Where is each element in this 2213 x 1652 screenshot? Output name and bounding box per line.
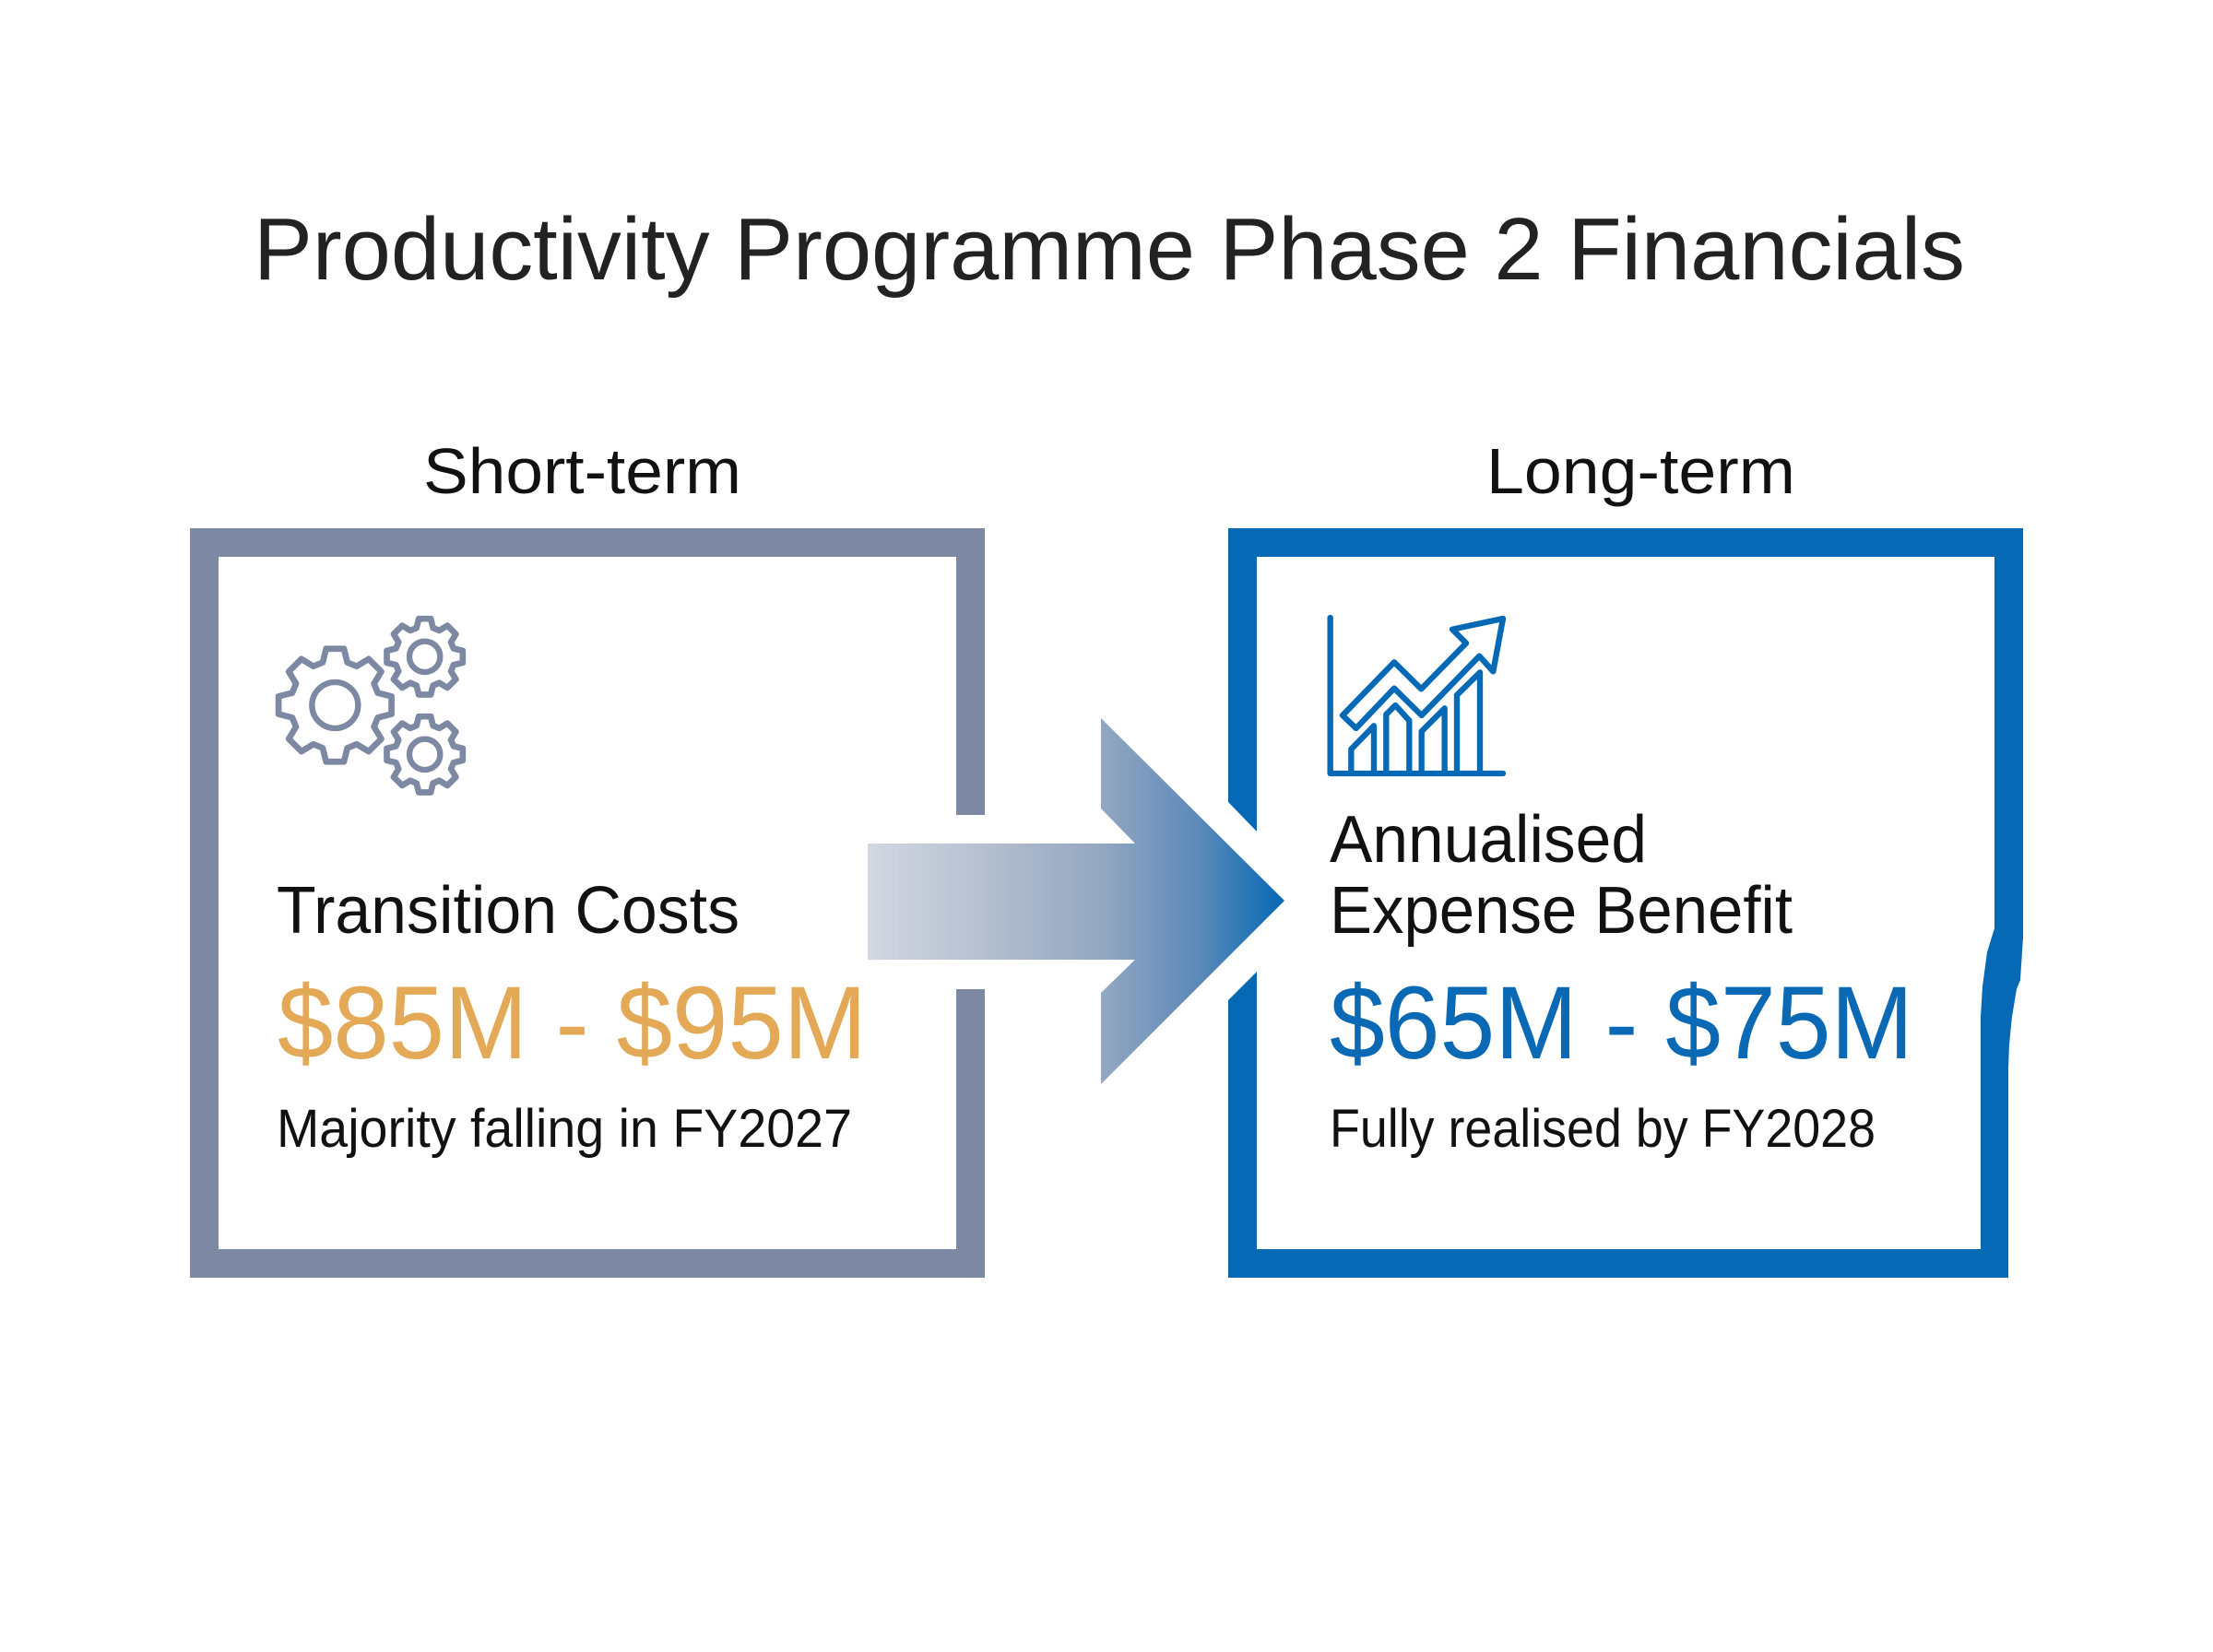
panel: short-term transition costs (190, 528, 985, 1278)
note: timing of benefit: Fully realised by FY2028 (1330, 1099, 1876, 1159)
title: Productivity Programme Phase 2 Financials (254, 200, 1965, 299)
panel: long-term annualised expense benefit (1228, 528, 2023, 1278)
icon: gears (278, 619, 463, 792)
value: cost range: $85M - $95M (278, 965, 867, 1080)
arrow: short-term to long-term (868, 718, 1284, 1084)
label: transition costs: Transition Costs (277, 874, 740, 948)
panel frame: grey border (190, 528, 985, 1278)
label: annualised expense benefit (1330, 803, 1793, 948)
note: timing of costs: Majority falling in FY2027 (277, 1099, 852, 1159)
label: annualised expense benefit: Annualised (1330, 803, 1647, 877)
icon: rising chart with arrow (1331, 618, 1503, 773)
value: benefit range: $65M - $75M (1330, 965, 1913, 1080)
label: annualised expense benefit: Expense Benefit (1330, 874, 1793, 948)
heading: long-term: Long-term (1486, 435, 1795, 507)
panel frame: blue border (1228, 528, 2023, 1278)
heading: short-term: Short-term (423, 435, 741, 507)
